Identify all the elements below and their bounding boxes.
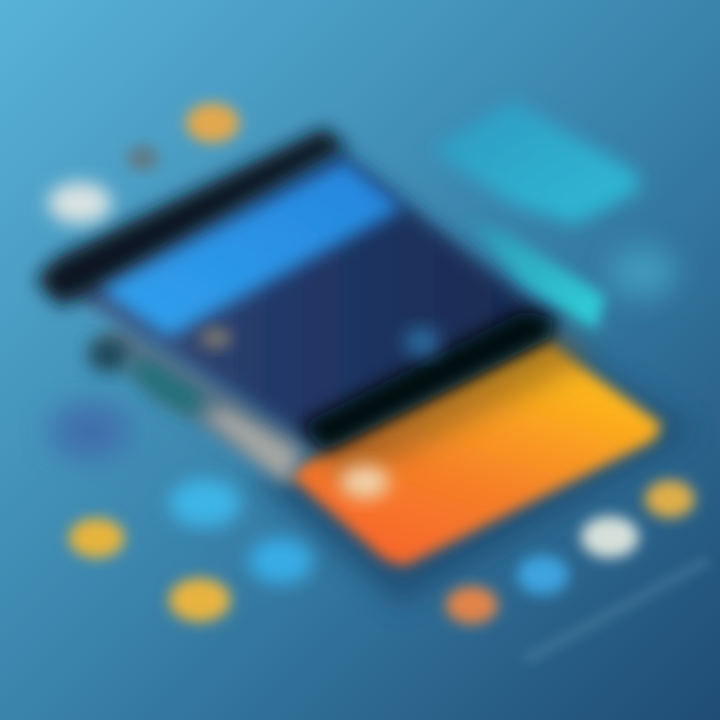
icon: blue circle [249, 538, 313, 584]
phone top bezel [36, 128, 347, 306]
teal card top right [432, 100, 640, 224]
teal strip [470, 222, 606, 330]
icon: grey circle [127, 145, 159, 171]
bezel shadow on card [310, 330, 590, 480]
icon: orange circle bottom [446, 586, 498, 624]
icon: light blue circle [169, 479, 241, 527]
screen orange dot [200, 326, 232, 350]
icon: white circle right [581, 516, 639, 558]
phone body [36, 128, 556, 452]
faint teal icon [608, 246, 676, 298]
icon: yellow circle right [645, 480, 695, 518]
icon: dark blue circle [50, 403, 130, 459]
screen blue dot [404, 328, 440, 356]
icon: yellow circle bottom [169, 578, 231, 622]
icon: yellow circle left [69, 518, 125, 558]
faint bar bottom right [520, 555, 712, 665]
phone underside edge [88, 325, 310, 484]
icon: blue circle bottom right [517, 555, 569, 595]
phone header blue [100, 160, 404, 338]
orange card [255, 330, 695, 605]
phone screen dark [72, 150, 556, 445]
icon: orange circle [186, 103, 240, 143]
white glow on orange card [340, 465, 390, 499]
icon: white circle [48, 182, 112, 224]
phone bottom bezel [300, 310, 556, 452]
